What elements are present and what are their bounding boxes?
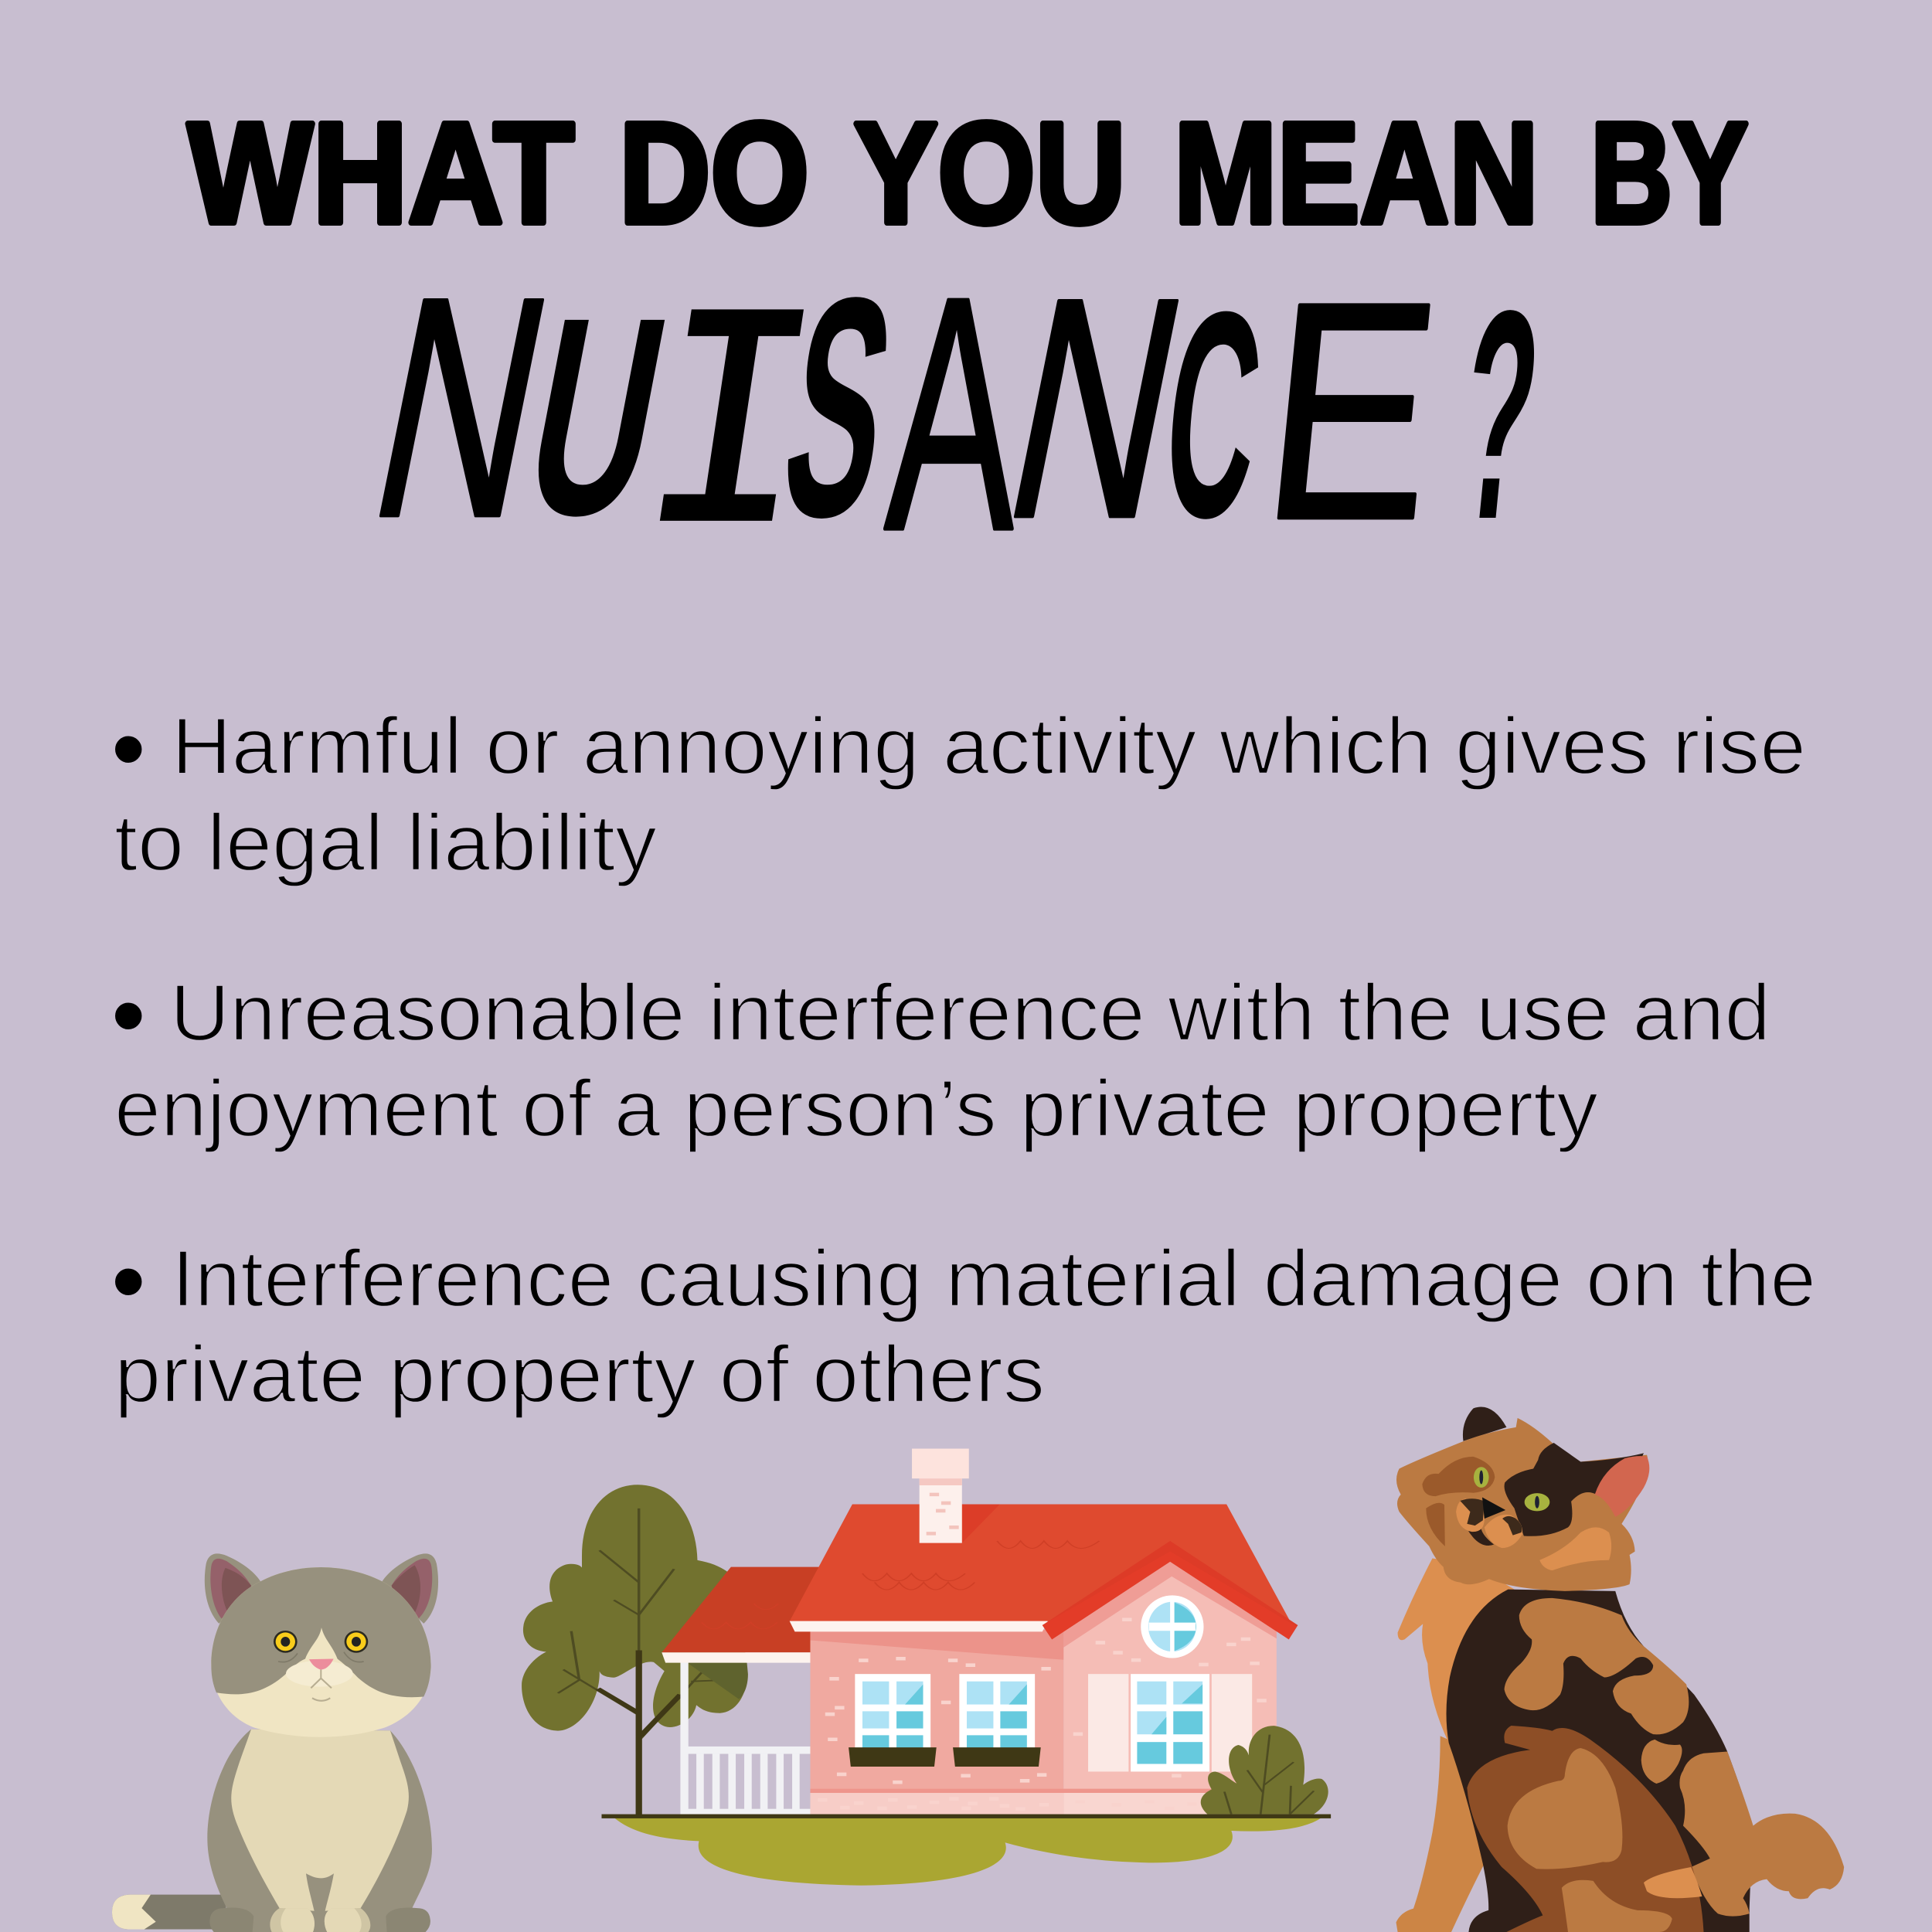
flower boxes bbox=[849, 1747, 1041, 1767]
bullet 2 bbox=[111, 960, 1770, 1154]
bullet 3 bbox=[111, 1226, 1816, 1420]
icon: house with tree bbox=[522, 1449, 1331, 1886]
title: nuisance: I bbox=[624, 255, 837, 587]
title: nuisance: E bbox=[1252, 238, 1451, 583]
bullet 1: • bbox=[111, 693, 145, 803]
icon: calico cat bbox=[1396, 1406, 1844, 1932]
title: nuisance: ? bbox=[1448, 249, 1552, 582]
chimney bbox=[912, 1449, 969, 1543]
tree bbox=[522, 1485, 747, 1816]
haunch bbox=[1467, 1726, 1704, 1932]
bullet 2: enjoyment of a person’s private property bbox=[114, 1064, 1598, 1154]
body bbox=[1447, 1590, 1753, 1932]
bullet 1: to legal liability bbox=[114, 798, 657, 888]
walls bbox=[810, 1630, 1063, 1815]
muzzle bbox=[1467, 1529, 1494, 1546]
side roof bbox=[662, 1567, 821, 1652]
title: nuisance: N bbox=[350, 233, 573, 583]
title: nuisance: U bbox=[506, 260, 686, 574]
bullet 3: Interference causing material damage on the bbox=[172, 1234, 1816, 1324]
title: what do you mean by: YOU bbox=[854, 94, 1126, 253]
title: what do you mean by: DO bbox=[619, 94, 809, 253]
porch bbox=[680, 1662, 811, 1815]
title: nuisance: C bbox=[1152, 251, 1274, 580]
bush bbox=[1201, 1726, 1328, 1815]
front leg bbox=[1396, 1736, 1485, 1932]
bricks bbox=[818, 1617, 1267, 1811]
back patches bbox=[1505, 1598, 1689, 1734]
window middle bbox=[959, 1674, 1035, 1751]
title: nuisance bbox=[350, 227, 1552, 600]
bullet 1 bbox=[111, 693, 1806, 888]
title: what do you mean by: WHAT bbox=[188, 94, 574, 253]
ground line bbox=[601, 1815, 1331, 1818]
round window bbox=[1141, 1595, 1204, 1658]
roof trim bbox=[790, 1621, 1048, 1631]
title: what do you mean by: BY bbox=[1590, 94, 1748, 253]
title: what do you mean by: MEAN bbox=[1174, 94, 1539, 253]
chest fur bbox=[1398, 1559, 1515, 1743]
bullet list bbox=[111, 693, 1816, 1420]
title: nuisance: N bbox=[985, 233, 1208, 583]
eyes bbox=[1474, 1467, 1489, 1488]
title: nuisance: S bbox=[765, 233, 912, 583]
head bbox=[1463, 1406, 1506, 1441]
title: nuisance: A bbox=[881, 227, 1026, 600]
icon: grey and cream cat bbox=[112, 1553, 438, 1932]
window left bbox=[855, 1674, 930, 1751]
bullet 2: Unreasonable interference with the use and bbox=[170, 968, 1770, 1058]
tail and rump bbox=[1679, 1751, 1844, 1917]
title: what do you mean by bbox=[188, 94, 1748, 253]
main roof bbox=[790, 1504, 1290, 1621]
bullet 3: • bbox=[111, 1226, 145, 1335]
window right with shutters bbox=[1088, 1674, 1252, 1771]
lawn bbox=[614, 1818, 1321, 1886]
bullet 3: private property of others bbox=[114, 1330, 1045, 1420]
bullet 1: Harmful or annoying activity which gives rise bbox=[172, 702, 1806, 791]
bullet 2: • bbox=[111, 960, 145, 1070]
